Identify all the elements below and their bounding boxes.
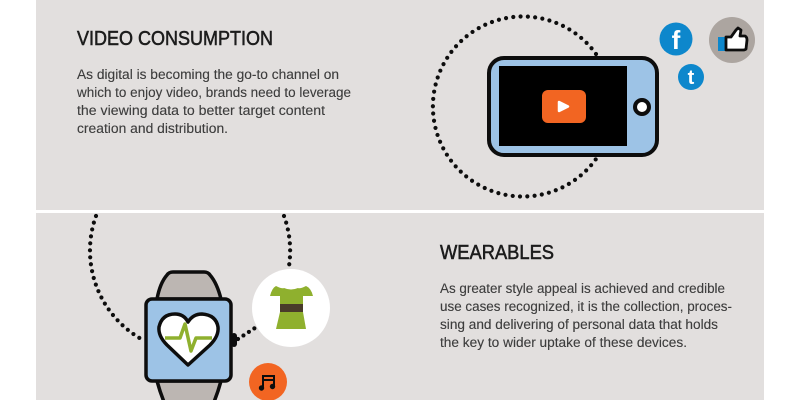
panel: wearables [36,213,764,400]
text block: video consumption description [76,67,351,136]
dotted circle: wearables left arc [90,216,143,340]
text block: wearables description [440,281,732,350]
heading: video consumption: VIDEO CONSUMPTION [77,28,273,50]
text block: wearables description: use cases recognized, it is the collection, proces- [440,299,732,314]
text block: wearables description: As greater style appeal is achieved and credible [440,281,725,296]
dotted circle: wearables right arc [284,216,290,266]
text block: wearables description: sing and delivering of personal data that holds [440,317,718,332]
icon: tumblr [678,64,704,90]
text block: video consumption description: the viewing data to better target content [77,103,325,118]
icon: play button [542,90,586,123]
icon: smartwatch [146,272,237,400]
dotted circle: video [433,17,596,197]
icon: facebook [660,22,692,56]
icon: facebook: f [672,25,681,55]
text block: wearables description: the key to wider uptake of these devices. [440,335,687,350]
icon: heart rate [159,314,218,365]
text block: video consumption description: creation and distribution. [77,121,228,136]
heading: wearables: WEARABLES [440,242,554,264]
icon: dress in white circle [252,269,330,347]
text block: video consumption description: which to enjoy video, brands need to leverage [76,85,351,100]
dotted circle: wearables lower arc [238,326,258,339]
icon: home button [635,100,649,114]
icon: thumbs up [709,17,755,63]
panel: video consumption [36,0,764,210]
icon: music note [249,363,287,400]
icon: tumblr: t [688,67,695,89]
text block: video consumption description: As digital is becoming the go-to channel on [77,67,339,82]
icon: smartphone [489,58,657,155]
